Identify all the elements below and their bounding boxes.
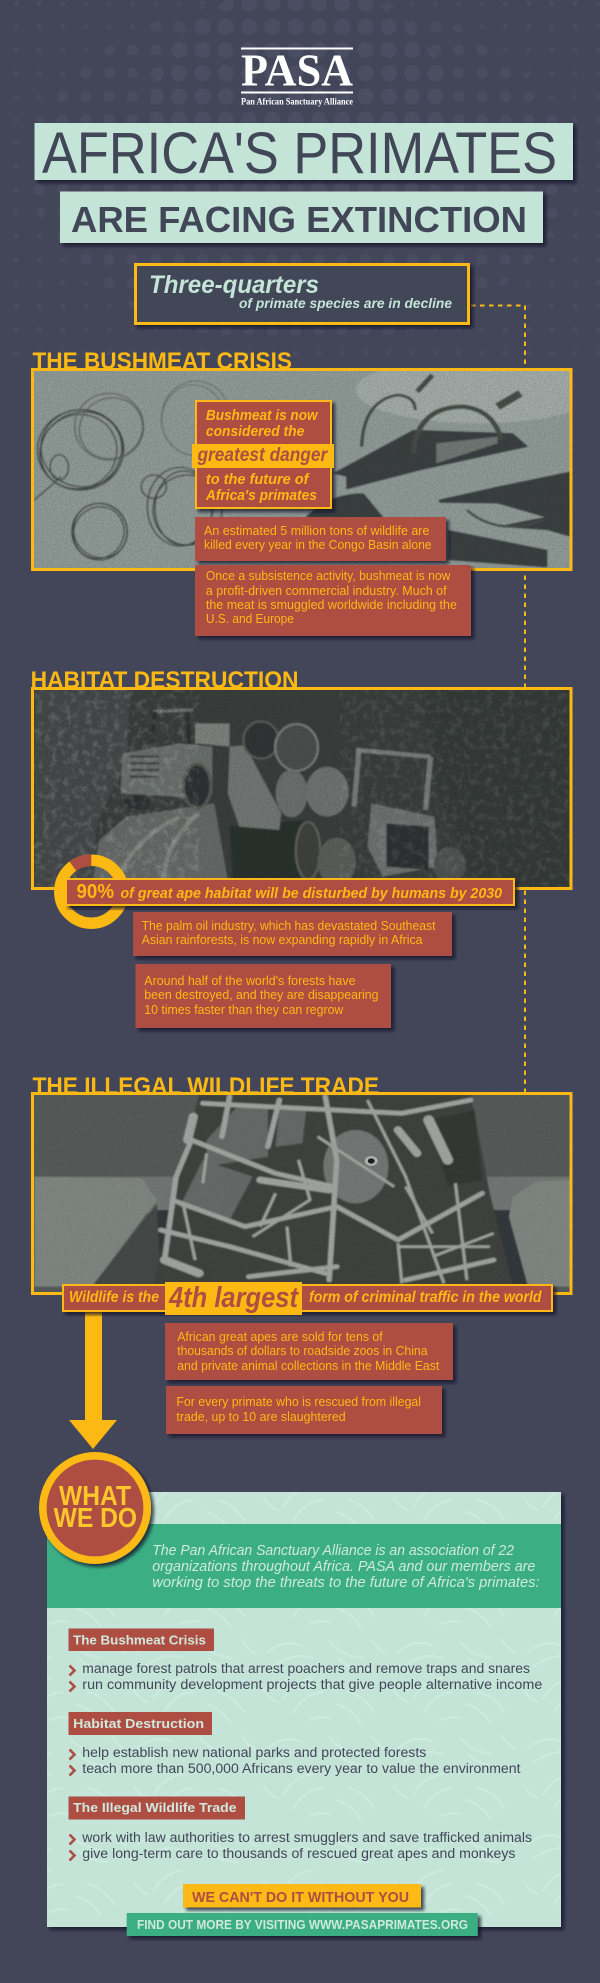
section heading: illegal wildlife trade: THE ILLEGAL WILDLIFE TRADE <box>32 1073 379 1100</box>
title: Africa's Primates: AFRICA'S PRIMATES <box>42 121 557 186</box>
action group: habitat destruction <box>68 1712 521 1776</box>
callout: greatest danger: greatest danger <box>197 445 329 466</box>
callout: greatest danger: Africa's primates <box>205 487 317 504</box>
action group: bushmeat crisis: The Bushmeat Crisis <box>73 1632 206 1648</box>
logo: PASA: PASA <box>241 44 353 96</box>
callout: three-quarters: of primate species are in decline <box>239 295 452 311</box>
section heading: the bushmeat crisis: THE BUSHMEAT CRISIS <box>32 348 292 375</box>
banner: 90 percent of habitat: 90% <box>76 881 114 903</box>
text box: 5 million tons: An estimated 5 million tons of wildlife are <box>204 524 429 538</box>
banner: 90 percent of habitat <box>66 879 514 905</box>
call to action: website <box>127 1913 478 1936</box>
banner: 90 percent of habitat: of great ape habitat will be disturbed by humans by 2030 <box>120 885 503 902</box>
call to action: website: FIND OUT MORE BY VISITING WWW.PASAPRIMATES.ORG <box>137 1917 468 1932</box>
text box: rescued primates: trade, up to 10 are slaughtered <box>176 1410 346 1424</box>
action group: bushmeat crisis: run community development projects that give people alternative income <box>82 1677 542 1692</box>
donut chart: 90 percent <box>60 860 123 923</box>
text box: palm oil: The palm oil industry, which has devastated Southeast <box>142 919 436 933</box>
badge: what we do: WE DO <box>54 1502 137 1533</box>
call to action: we can't do it without you <box>183 1884 421 1908</box>
text box: commercial industry: the meat is smuggled worldwide including the <box>206 598 457 612</box>
photo: logging trucks <box>34 690 570 890</box>
dashed connector line <box>471 306 525 1092</box>
banner: 4th largest: form of criminal traffic in the world <box>309 1289 543 1306</box>
text box: great apes sold: African great apes are sold for tens of <box>177 1330 383 1344</box>
badge: what we do: WHAT <box>59 1480 131 1511</box>
text box: palm oil: Asian rainforests, is now expanding rapidly in Africa <box>142 933 423 947</box>
text box: 5 million tons <box>195 517 446 561</box>
section heading: habitat destruction: HABITAT DESTRUCTION <box>31 667 298 694</box>
photo frame: wildlife trade <box>32 1094 571 1294</box>
text box: 5 million tons: killed every year in the Congo Basin alone <box>204 538 432 552</box>
logo: PASA: Pan African Sanctuary Alliance <box>241 98 353 108</box>
text box: great apes sold <box>165 1323 453 1380</box>
text box: forests: Around half of the world's forests have <box>144 974 356 988</box>
badge: what we do <box>39 1452 151 1564</box>
banner: 4th largest <box>63 1282 552 1315</box>
callout: greatest danger: Bushmeat is now <box>206 407 319 424</box>
text box: commercial industry: Once a subsistence activity, bushmeat is now <box>206 569 451 583</box>
text box: palm oil <box>133 912 452 956</box>
callout: three-quarters <box>136 264 468 324</box>
text box: great apes sold: and private animal collections in the Middle East <box>177 1359 440 1373</box>
action group: habitat destruction: teach more than 500,000 Africans every year to value the environment <box>82 1761 521 1776</box>
action group: bushmeat crisis: manage forest patrols that arrest poachers and remove traps and snares <box>82 1661 530 1676</box>
action group: habitat destruction: help establish new national parks and protected forests <box>82 1745 427 1760</box>
intro band: organizations throughout Africa. PASA and our members are <box>152 1559 535 1575</box>
action group: habitat destruction: Habitat Destruction <box>73 1716 204 1731</box>
callout: greatest danger: considered the <box>206 423 304 440</box>
intro band <box>47 1524 561 1608</box>
text box: commercial industry: U.S. and Europe <box>206 612 294 626</box>
banner: 4th largest: Wildlife is the <box>69 1289 159 1306</box>
text box: forests: been destroyed, and they are disappearing <box>144 988 379 1002</box>
panel: what we do <box>47 1492 561 1927</box>
text box: forests: 10 times faster than they can regrow <box>144 1003 344 1017</box>
intro band: working to stop the threats to the future of Africa's primates: <box>152 1575 540 1591</box>
callout: three-quarters: Three-quarters <box>149 271 319 299</box>
call to action: we can't do it without you: WE CAN'T DO IT WITHOUT YOU <box>192 1889 409 1906</box>
photo frame: habitat <box>32 688 571 888</box>
action group: illegal wildlife trade: give long-term care to thousands of rescued great apes and monkeys <box>82 1846 516 1861</box>
banner: 4th largest: 4th largest <box>168 1282 299 1314</box>
photo frame: bushmeat <box>32 370 571 570</box>
callout: greatest danger: to the future of <box>206 471 310 488</box>
photo: primate in net cage <box>34 1095 570 1292</box>
subtitle: are facing extinction: ARE FACING EXTINCTION <box>71 199 527 240</box>
text box: commercial industry: a profit-driven commercial industry. Much of <box>206 584 447 598</box>
text box: great apes sold: thousands of dollars to roadside zoos in China <box>177 1344 428 1358</box>
text box: forests <box>136 964 391 1028</box>
action group: illegal wildlife trade: work with law authorities to arrest smugglers and save trafficked animals <box>81 1830 532 1845</box>
text box: rescued primates: For every primate who is rescued from illegal <box>176 1395 421 1409</box>
photo: snares and traps <box>34 371 570 568</box>
text box: rescued primates <box>166 1386 442 1434</box>
arrow: down to what we do <box>69 1300 117 1449</box>
action group: illegal wildlife trade: The Illegal Wildlife Trade <box>73 1800 236 1815</box>
action group: illegal wildlife trade <box>68 1796 532 1861</box>
intro band: The Pan African Sanctuary Alliance is an association of 22 <box>152 1543 514 1559</box>
text box: commercial industry <box>195 565 471 636</box>
action group: bushmeat crisis <box>68 1628 542 1692</box>
callout: greatest danger <box>192 401 334 508</box>
